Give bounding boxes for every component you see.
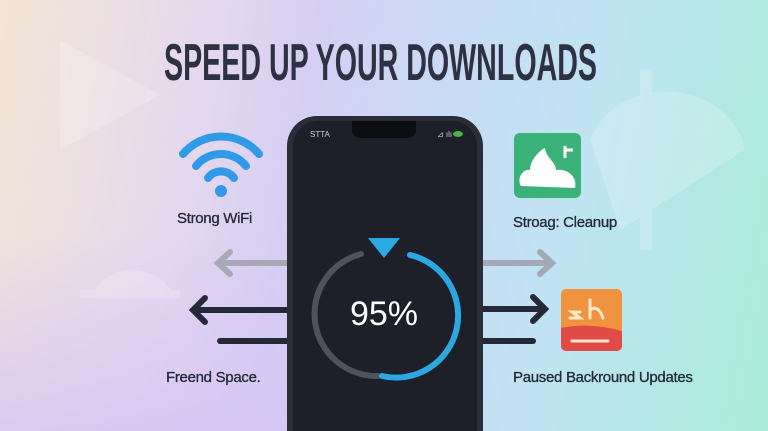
- label: paused updates: Paused Backround Updates: [513, 369, 693, 386]
- progress ring: [315, 254, 458, 378]
- phone: 95%: [350, 295, 418, 333]
- icon: storage cleanup: [514, 133, 581, 198]
- arrows right: [480, 252, 552, 341]
- phone: STTA: [310, 130, 331, 139]
- label: strong wifi: Strong WiFi: [177, 210, 252, 227]
- phone: [287, 116, 483, 431]
- label: freend space: Freend Space.: [166, 369, 260, 386]
- icon: paused updates: [561, 289, 622, 351]
- phone: ⊿ ılı: [437, 130, 452, 139]
- label: storage cleanup: Stroag: Cleanup: [513, 214, 617, 231]
- decorative ghost shapes: [60, 40, 745, 298]
- arrows left: [193, 252, 290, 341]
- icon: wifi: [183, 136, 259, 197]
